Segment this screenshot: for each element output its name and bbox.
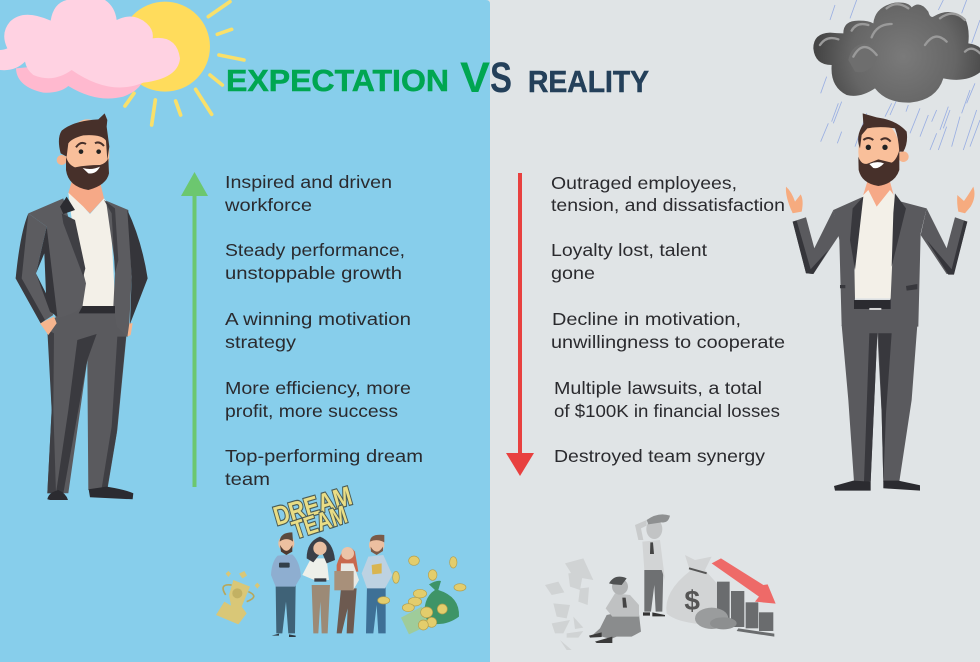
illustration: confident businessman (16, 113, 148, 500)
text block: reality list (551, 173, 785, 466)
icon: money bag (666, 555, 718, 625)
text block: reality list: tension, and dissatisfaction (551, 195, 785, 215)
icon: money bag: $ (684, 585, 700, 616)
person 3 (334, 547, 359, 633)
illustration: frustrated businessman (786, 113, 975, 491)
icon: rain (821, 0, 980, 150)
arrow: red falling (712, 558, 776, 604)
title (226, 54, 649, 102)
text block: reality list: Outraged employees, (551, 173, 737, 193)
person: standing worried man (635, 514, 670, 616)
person 1 (271, 532, 301, 637)
text block: reality list: Multiple lawsuits, a total (554, 378, 762, 398)
text block: expectation list: A winning motivation (225, 309, 411, 329)
text block: reality list: gone (551, 263, 595, 283)
icon: scattered papers (545, 558, 593, 650)
heading: dream team sign: DREAM (270, 481, 355, 531)
text block: expectation list: workforce (224, 195, 312, 215)
panel: expectation background (0, 0, 490, 662)
arrow: green up (181, 172, 208, 487)
text block: expectation list: profit, more success (225, 401, 398, 421)
icon: money bag and coins (378, 556, 466, 634)
text block: expectation list: unstoppable growth (225, 263, 402, 283)
arrow: red down (506, 173, 534, 476)
bar chart: declining bars (695, 582, 774, 637)
text block: expectation list: strategy (225, 332, 296, 352)
person 2 (302, 537, 335, 633)
text block: expectation list: Top-performing dream (225, 446, 423, 466)
icon: storm cloud (813, 3, 980, 103)
text block: expectation list: Steady performance, (225, 240, 405, 260)
text block: reality list: of $100K in financial losses (554, 401, 780, 421)
title: S (490, 54, 512, 102)
icon: trophy (216, 571, 260, 624)
text block: reality list: Destroyed team synergy (554, 446, 765, 466)
person: sitting sad man (589, 577, 641, 643)
text block: expectation list: Inspired and driven (225, 172, 392, 192)
title: V (460, 54, 490, 102)
text block: expectation list: More efficiency, more (225, 378, 411, 398)
title: EXPECTATION (226, 63, 449, 98)
icon: sun (120, 2, 244, 125)
text block: reality list: Loyalty lost, talent (551, 240, 707, 260)
person 4 (362, 535, 392, 633)
text block: reality list: Decline in motivation, (552, 309, 741, 329)
text block: reality list: unwillingness to cooperate (551, 332, 785, 352)
text block: expectation list: team (225, 469, 270, 489)
text block: expectation list (224, 172, 423, 489)
title: REALITY (528, 64, 649, 99)
heading: dream team sign (270, 481, 355, 545)
illustration: financial loss (545, 514, 776, 650)
icon: pink cloud (0, 0, 180, 99)
heading: dream team sign: TEAM (289, 501, 351, 545)
illustration: dream team (216, 481, 466, 637)
